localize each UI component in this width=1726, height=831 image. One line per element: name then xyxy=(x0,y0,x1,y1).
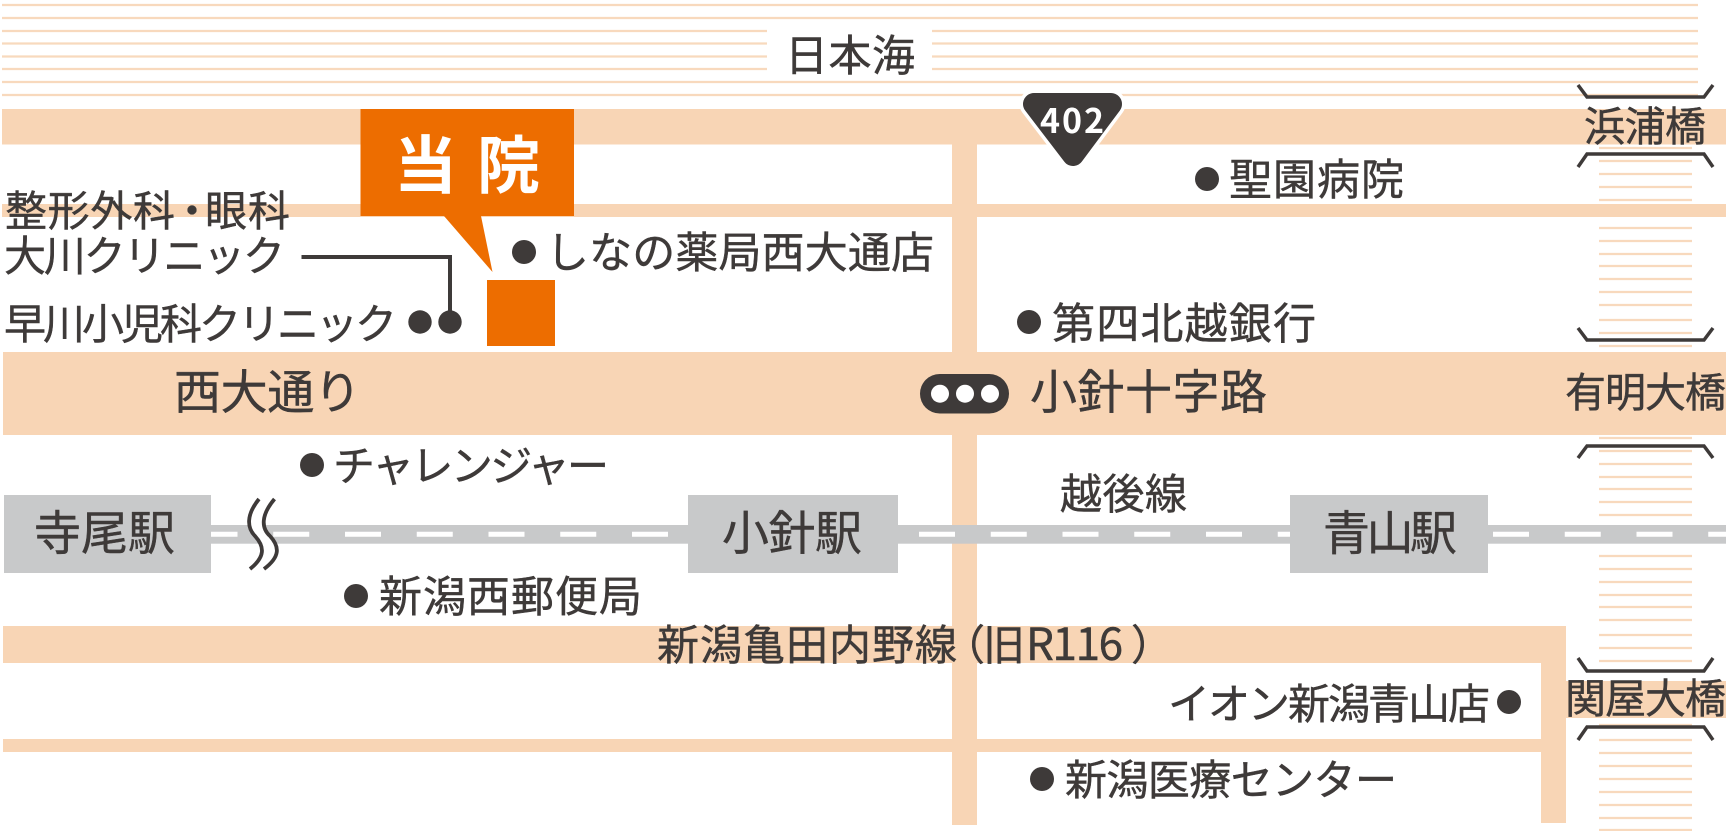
label: orthopedics and ophthalmology clinic xyxy=(4,178,462,334)
label: pediatrics clinic: 早川小児科クリニック xyxy=(4,291,397,352)
icon: traffic signal xyxy=(920,374,1009,414)
label: Echigo line: 越後線 xyxy=(1060,461,1187,522)
label: Sea of Japan: 日本海 xyxy=(785,22,915,84)
label: bank: 第四北越銀行 xyxy=(1052,290,1316,352)
icon: line break squiggle xyxy=(249,499,277,569)
label: Aeon: イオン新潟青山店 xyxy=(1168,671,1490,732)
bridge: Ariake: 有明大橋 xyxy=(1565,359,1726,419)
sea: Sea of Japan water lines xyxy=(2,5,1698,95)
label: Kobari crossing: 小針十字路 xyxy=(1030,354,1267,423)
label: post office: 新潟西郵便局 xyxy=(379,563,642,625)
station: Terao xyxy=(4,495,211,573)
label: orthopedics and ophthalmology clinic: 大川クリニック xyxy=(4,223,285,284)
station: Terao: 寺尾駅 xyxy=(34,495,175,564)
label: medical center: 新潟医療センター xyxy=(1065,747,1397,808)
label: Challenger: チャレンジャー xyxy=(333,433,609,494)
bridge: Sekiya: 関屋大橋 xyxy=(1565,665,1726,725)
label: Niigata Kameda Uchino line: 旧 xyxy=(983,612,1025,673)
bridge: Hamaura xyxy=(1578,85,1713,167)
route badge: 402 xyxy=(1034,94,1111,155)
bridge: Ariake xyxy=(1565,328,1726,458)
railway: Echigo line xyxy=(202,525,1726,544)
label: orthopedics and ophthalmology clinic: 整形外科 xyxy=(5,178,175,239)
route badge: 402: 402 xyxy=(1040,94,1104,143)
station: Kobari: 小針駅 xyxy=(722,495,862,564)
label: Niigata Kameda Uchino line: R116 xyxy=(1026,609,1123,673)
river: water lines xyxy=(1599,148,1692,830)
label: orthopedics and ophthalmology clinic: 科 xyxy=(248,178,290,239)
marker: clinic location xyxy=(487,280,555,346)
station: Aoyama: 青山駅 xyxy=(1323,495,1457,564)
bridge: Hamaura: 浜浦橋 xyxy=(1584,93,1706,153)
label: Niigata Kameda Uchino line: 新潟亀田内野線 xyxy=(657,612,957,673)
label: Niigata Kameda Uchino line: （ xyxy=(943,612,985,673)
label: Nishi-odori street: 西大通り xyxy=(174,354,361,423)
station: Kobari xyxy=(688,495,898,573)
label: orthopedics and ophthalmology clinic: ・ xyxy=(171,178,213,239)
label: orthopedics and ophthalmology clinic: 眼 xyxy=(205,178,247,239)
label: pharmacy: しなの薬局西大通店 xyxy=(546,219,934,281)
callout: this clinic xyxy=(360,109,574,272)
label: Niigata Kameda Uchino line: ） xyxy=(1131,612,1173,673)
label: hospital: 聖園病院 xyxy=(1229,146,1404,208)
callout: this clinic: 当院 xyxy=(394,116,540,207)
station: Aoyama xyxy=(1290,495,1488,573)
